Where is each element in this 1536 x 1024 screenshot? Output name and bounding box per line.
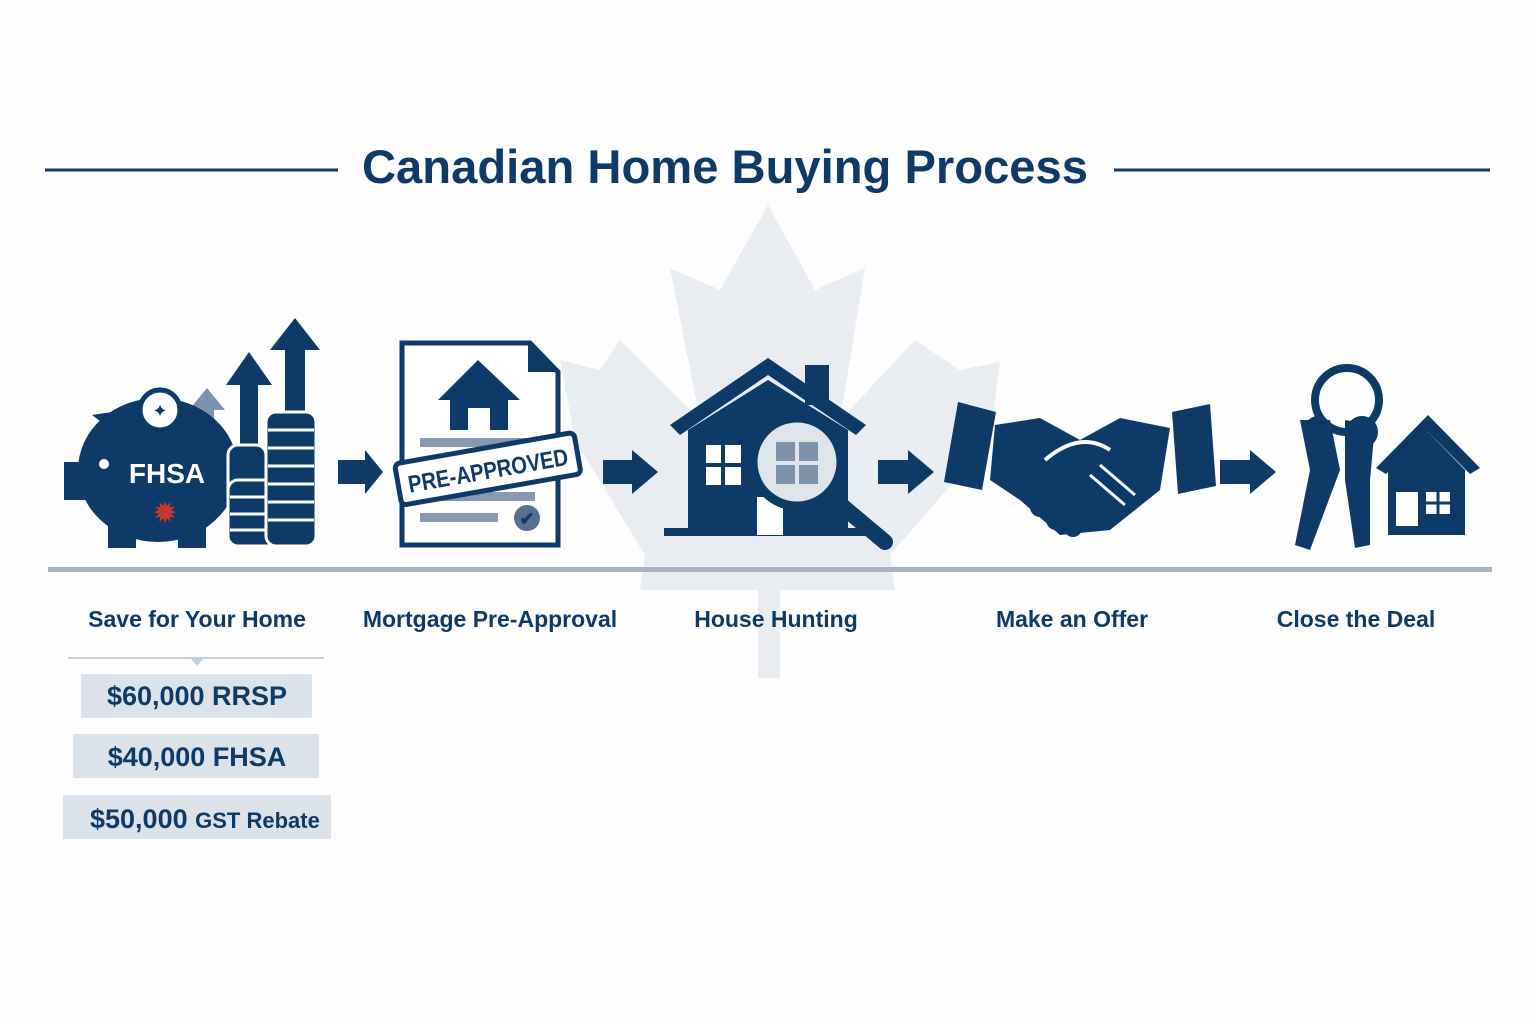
icon: piggy bank with coins: FHSA	[129, 458, 205, 489]
icon: house with magnifier	[664, 358, 885, 542]
savings callouts: $60,000 RRSP	[107, 681, 287, 711]
icon: pre-approved document: PRE-APPROVED	[406, 444, 570, 499]
step labels: Make an Offer	[996, 606, 1148, 632]
arrow 1	[338, 450, 383, 494]
title: Canadian Home Buying Process	[362, 140, 1088, 193]
baseline	[48, 567, 1492, 572]
icon: pre-approved document	[395, 343, 581, 545]
icon: piggy bank with coins: ✦	[152, 401, 168, 421]
savings callouts: $40,000 FHSA	[108, 742, 286, 772]
savings callouts: $50,000 GST Rebate	[90, 804, 320, 834]
icon: piggy bank with coins: ✹	[152, 497, 178, 530]
background maple leaf	[560, 205, 1000, 678]
icon: keys and house	[1295, 368, 1480, 550]
step labels: Save for Your Home	[88, 606, 306, 632]
icon: pre-approved document: ✔	[519, 509, 535, 529]
step labels: House Hunting	[694, 606, 858, 632]
arrow 4	[1220, 450, 1276, 494]
arrow 2	[603, 450, 658, 494]
step labels: Close the Deal	[1277, 606, 1435, 632]
icon: piggy bank with coins	[64, 318, 320, 548]
icon: handshake	[944, 402, 1216, 537]
step labels	[88, 606, 1435, 632]
step labels: Mortgage Pre-Approval	[363, 606, 617, 632]
arrow 3	[878, 450, 934, 494]
savings callouts	[63, 658, 331, 839]
